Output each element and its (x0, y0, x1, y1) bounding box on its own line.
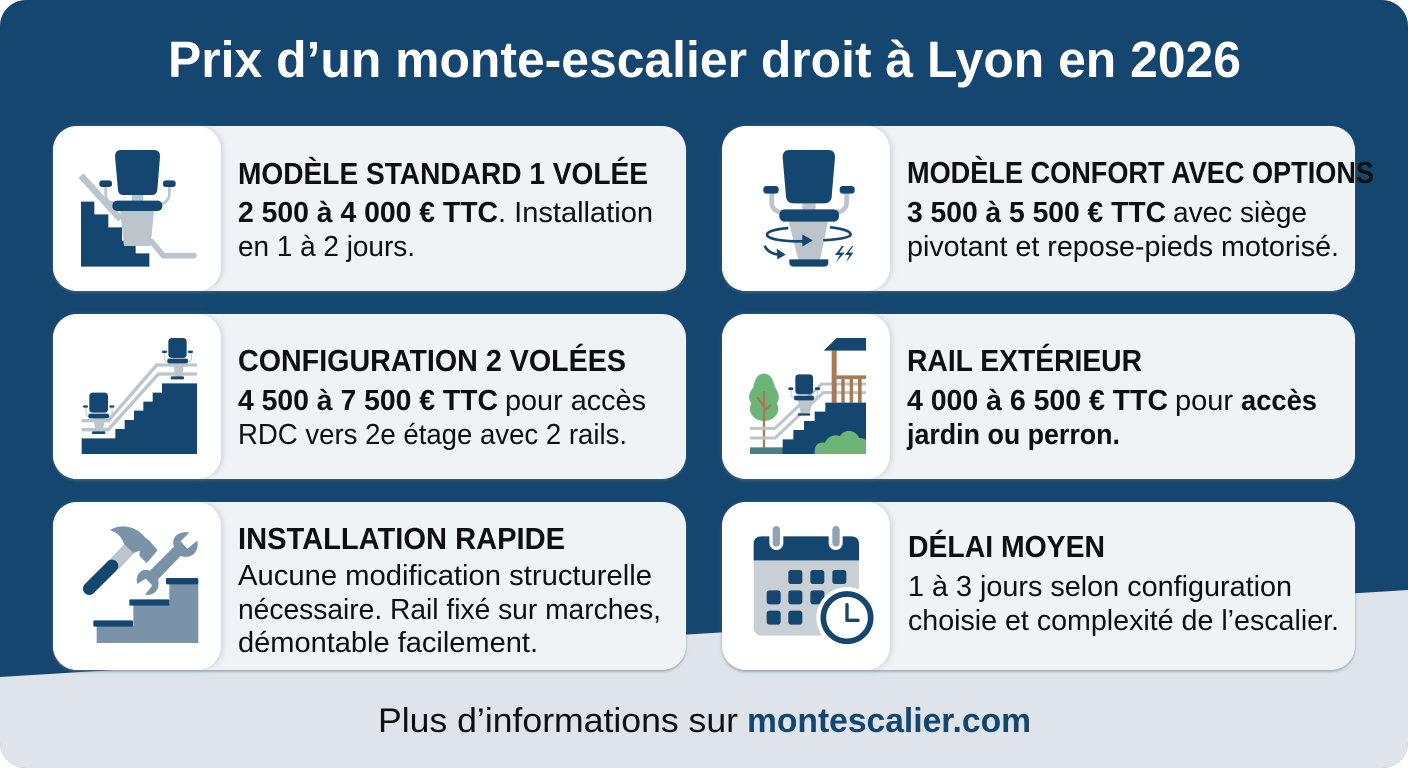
text block: nécessaire. Rail fixé sur marches, (238, 594, 661, 626)
text block: 2 500 à 4 000 € TTC (238, 197, 498, 229)
text block: démontable facilement. (238, 627, 538, 659)
panel: rail extérieur (722, 314, 1355, 479)
footer: montescalier.com (747, 702, 1031, 740)
panel: délai moyen (722, 502, 1355, 670)
heading: INSTALLATION RAPIDE (238, 522, 565, 556)
text block: 3 500 à 5 500 € TTC (907, 197, 1166, 229)
text block: choisie et complexité de l’escalier. (908, 605, 1339, 637)
panel: installation rapide (53, 502, 686, 670)
heading: RAIL EXTÉRIEUR (907, 343, 1142, 378)
icon: siège pivotant (763, 150, 855, 267)
icon: calendrier et horloge (754, 524, 878, 648)
text block (908, 571, 1339, 637)
text block: pour (1175, 385, 1234, 417)
panel: configuration 2 volées (53, 314, 686, 479)
footer: Plus d’informations sur (378, 702, 738, 740)
heading: MODÈLE STANDARD 1 VOLÉE (238, 156, 648, 191)
icon: monte-escalier sur marches (81, 150, 194, 267)
text block (238, 385, 646, 451)
heading: DÉLAI MOYEN (908, 529, 1105, 564)
heading: CONFIGURATION 2 VOLÉES (238, 343, 626, 378)
text block: pour accès (505, 385, 646, 417)
text block (238, 197, 653, 263)
text block: Aucune modification structurelle (238, 560, 652, 592)
text block: . Installation (498, 197, 653, 229)
text block: accès (1241, 385, 1317, 417)
text block: 1 à 3 jours selon configuration (908, 571, 1292, 603)
text block: 4 500 à 7 500 € TTC (238, 385, 498, 417)
text block: en 1 à 2 jours. (238, 231, 415, 263)
text block: avec siège (1173, 197, 1307, 229)
footer (378, 702, 1031, 740)
text block: pivotant et repose-pieds motorisé. (907, 231, 1339, 263)
text block (907, 197, 1339, 263)
text block: jardin ou perron. (906, 419, 1120, 451)
text block (238, 560, 661, 659)
text block: 4 000 à 6 500 € TTC (907, 385, 1168, 417)
title: Prix d’un monte-escalier droit à Lyon en 2026 (168, 31, 1241, 88)
icon: rail extérieur avec jardin (749, 338, 866, 454)
icon: marteau, clé et marches (89, 526, 198, 643)
icon: escalier deux chaises (82, 338, 197, 454)
panel: modèle confort (722, 126, 1374, 291)
text block (906, 385, 1317, 451)
panel: modèle standard (53, 126, 686, 291)
text block: RDC vers 2e étage avec 2 rails. (238, 419, 627, 451)
